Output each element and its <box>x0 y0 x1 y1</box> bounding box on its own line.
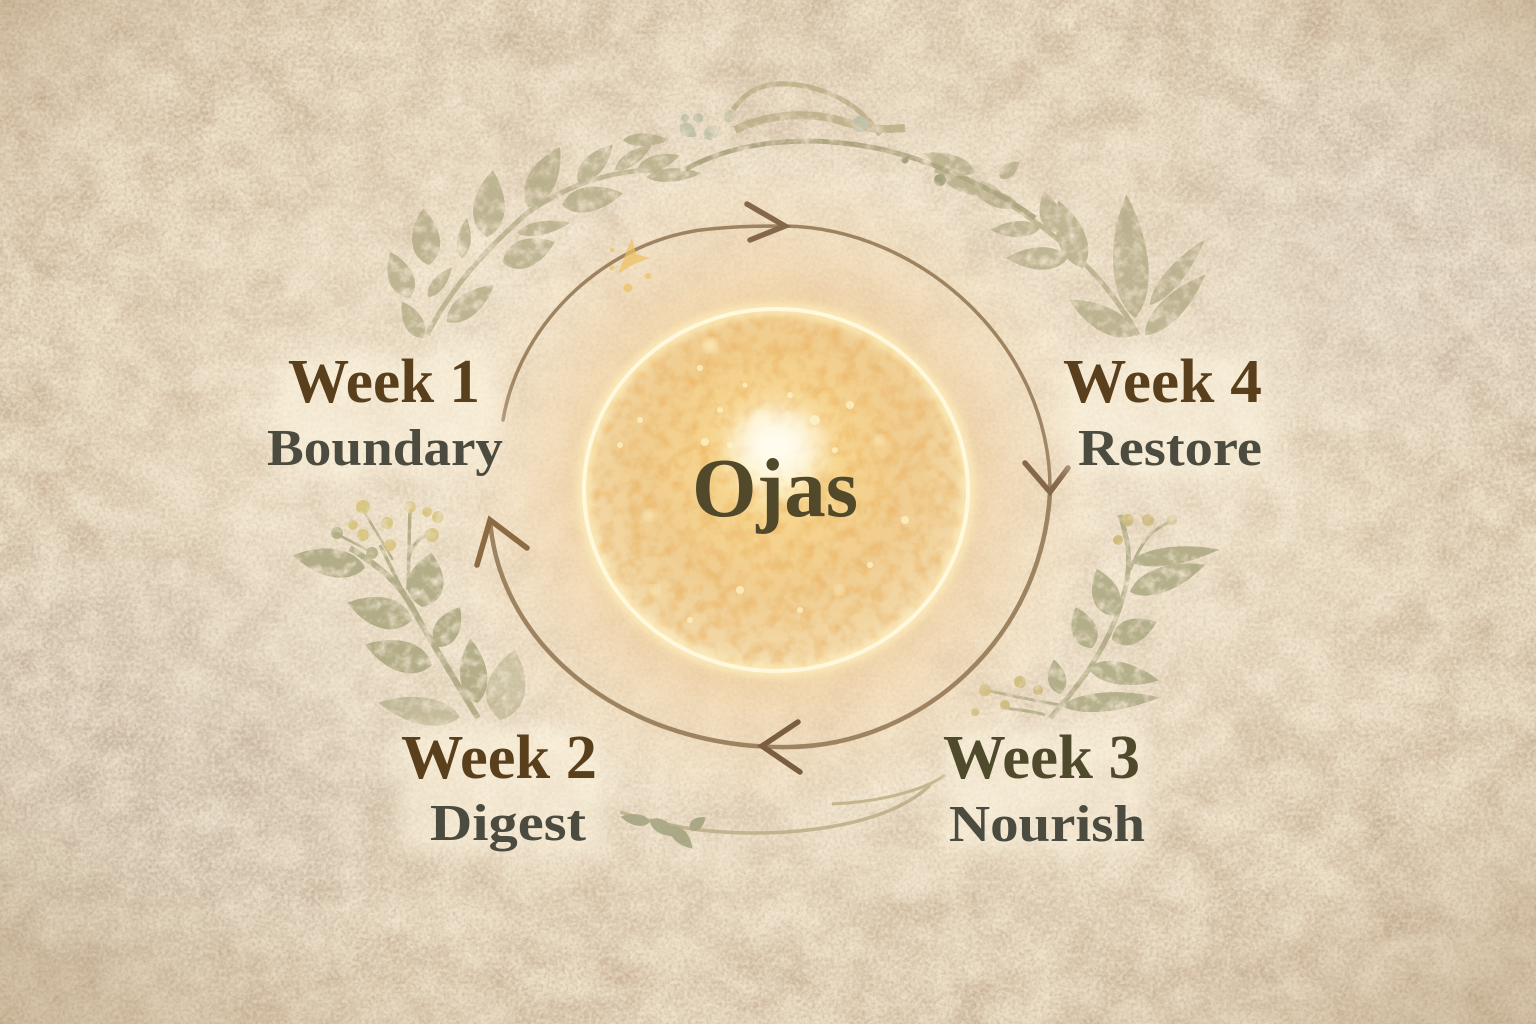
wreath: bottom-left branch <box>291 500 533 731</box>
label: Week 3 Nourish <box>943 724 1145 853</box>
wreath: top-right branch <box>920 145 1213 346</box>
label: Week 1 Boundary: Boundary <box>267 420 503 477</box>
label: Week 2 Digest: Digest <box>430 795 587 852</box>
arc: week 1 to week 4 <box>503 226 1050 492</box>
label: Week 2 Digest: Week 2 <box>401 724 597 792</box>
wreath: bottom-right branch <box>971 514 1220 718</box>
label: Week 3 Nourish: Week 3 <box>943 724 1140 792</box>
small pale leaves and buds <box>676 110 736 143</box>
orb sparkles <box>617 338 909 623</box>
wreath: top band and flourish <box>682 84 1035 218</box>
orb disc <box>584 309 968 671</box>
label: Week 4 Restore: Week 4 <box>1063 348 1262 416</box>
arrow head: bottom <box>762 722 800 772</box>
glowing centre orb <box>491 202 1064 778</box>
centre label: Ojas: Ojas <box>692 442 858 535</box>
label: Week 4 Restore <box>1063 348 1262 477</box>
arrow head: right <box>1025 463 1068 492</box>
bottom flourish <box>619 775 945 853</box>
arrow head: top <box>747 204 785 240</box>
orb glow ring <box>584 309 968 671</box>
arrow head: left <box>477 520 527 565</box>
wreath: top-left branch <box>379 110 736 343</box>
golden spark on ring <box>610 238 651 292</box>
yellow berries <box>331 500 444 559</box>
label glows <box>275 355 1270 853</box>
arc: week 4 to week 1 <box>490 492 1050 747</box>
orb mottling <box>580 305 972 675</box>
cycle ring with arrows <box>477 204 1068 772</box>
label: Week 4 Restore: Restore <box>1078 420 1262 477</box>
label: Week 1 Boundary <box>267 348 503 477</box>
label: Week 2 Digest <box>401 724 597 852</box>
label: Week 1 Boundary: Week 1 <box>288 348 480 416</box>
olive berries <box>971 514 1177 716</box>
label: Week 3 Nourish: Nourish <box>949 796 1145 853</box>
